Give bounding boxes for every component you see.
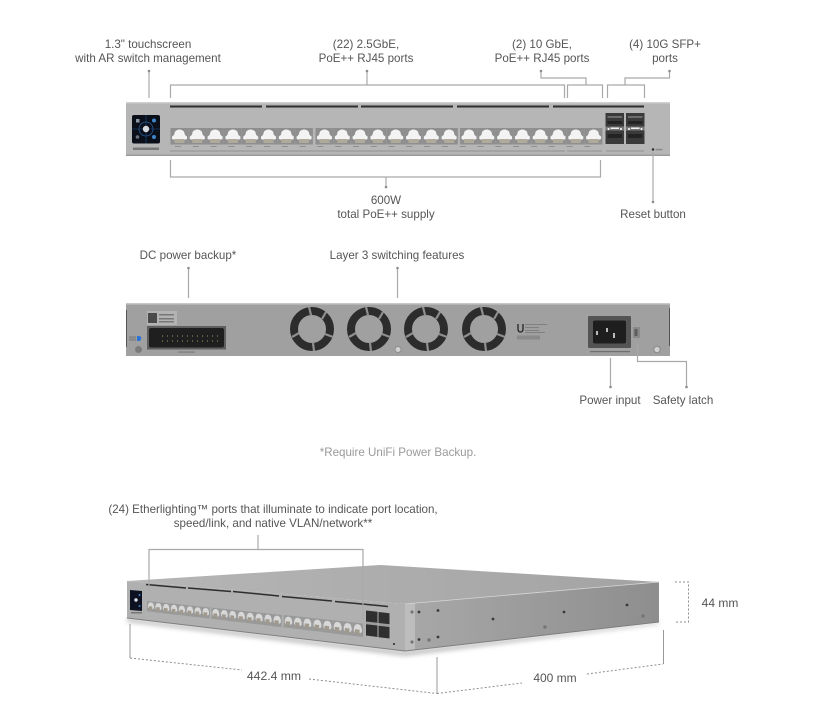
fan vent 4: [464, 307, 505, 351]
compliance logo and marks: [517, 324, 547, 340]
label: safety latch: Safety latch: [653, 394, 713, 407]
dimension: height 44 mm: 44 mm: [702, 596, 738, 610]
floor shadow: [127, 618, 659, 656]
fan vent 1: [292, 307, 333, 351]
top face: [127, 565, 659, 604]
side face: [405, 582, 659, 651]
screw: [395, 346, 401, 352]
port status strips: [170, 150, 644, 152]
label: 10 GbE ports: PoE++ RJ45 ports: [495, 52, 590, 65]
port number marks: [175, 146, 598, 148]
bracket: touchscreen leader: [148, 70, 150, 98]
top edge highlight: [405, 582, 659, 604]
fan vent 2: [349, 307, 390, 351]
leader: power input: [609, 358, 612, 388]
label: 10 GbE ports: (2) 10 GbE,: [512, 38, 572, 51]
leader: safety latch: [638, 345, 688, 388]
leader: DC power backup: [187, 267, 190, 298]
label: SFP+ ports: (4) 10G SFP+: [629, 38, 701, 51]
bracket: 10 GbE ports: [540, 70, 602, 98]
3D RJ45 ports: [147, 601, 363, 637]
QR label: [147, 311, 177, 325]
label: 2.5GbE ports: (22) 2.5GbE,: [333, 38, 399, 51]
label: DC power backup: DC power backup*: [140, 249, 237, 262]
safety latch: [633, 327, 640, 338]
top slots: [146, 584, 388, 606]
model name: [133, 148, 159, 150]
bottom edge: [127, 618, 659, 651]
icon: touchscreen: [132, 115, 160, 144]
panel: rear view of switch: [126, 303, 670, 356]
label: Layer 3 switching: Layer 3 switching features: [330, 249, 465, 262]
bracket: PoE supply: [170, 160, 600, 188]
dimension: height 44 mm: [675, 582, 738, 622]
label: Etherlighting ports: speed/link, and native VLAN/network**: [174, 517, 373, 530]
DC connector: [147, 326, 226, 353]
bracket: SFP+ ports: [608, 70, 671, 98]
front face: [127, 581, 405, 651]
leader: Layer 3 features: [396, 267, 399, 298]
leader: reset button: [652, 152, 654, 203]
label: 1.3 inch touchscreen: with AR switch management: [74, 52, 222, 65]
label: 2.5GbE ports: PoE++ RJ45 ports: [319, 52, 414, 65]
front ear: [405, 603, 415, 651]
screw: [135, 346, 142, 353]
side screws: [410, 604, 645, 644]
RJ45 ports: [170, 128, 602, 144]
dimension: width 442.4 mm: 442.4 mm: [247, 669, 301, 683]
dimension: width 442.4 mm: [130, 624, 437, 694]
label: power input: Power input: [579, 394, 641, 407]
panel: front view of switch: [126, 102, 670, 156]
3D SFP+ ports: [366, 610, 390, 638]
screw: [654, 346, 660, 353]
bracket: 2.5GbE ports: [170, 70, 564, 98]
dimension: depth 400 mm: [437, 630, 664, 694]
SFP+ ports: [606, 113, 644, 144]
fan vent 3: [406, 307, 447, 351]
bracket: Etherlighting ports: [149, 535, 363, 620]
power inlet: [588, 316, 631, 352]
dimension: depth 400 mm: 400 mm: [533, 671, 577, 685]
panel: 3D view of switch: [127, 565, 659, 656]
label: Etherlighting ports: (24) Etherlighting™ ports that illuminate to indicate port location,: [108, 503, 438, 516]
reset pinhole: [652, 148, 662, 151]
reset pinhole: [393, 643, 395, 645]
top slots: [170, 106, 644, 108]
label: reset button: Reset button: [620, 208, 686, 221]
blue indicator: [129, 336, 142, 341]
label: 600W supply: 600W: [371, 194, 401, 207]
label: 1.3 inch touchscreen: 1.3" touchscreen: [105, 38, 191, 51]
label: SFP+ ports: ports: [652, 52, 678, 65]
label: 600W supply: total PoE++ supply: [337, 208, 435, 221]
footnote: *Require UniFi Power Backup.: [320, 446, 476, 459]
screen: [130, 590, 142, 614]
